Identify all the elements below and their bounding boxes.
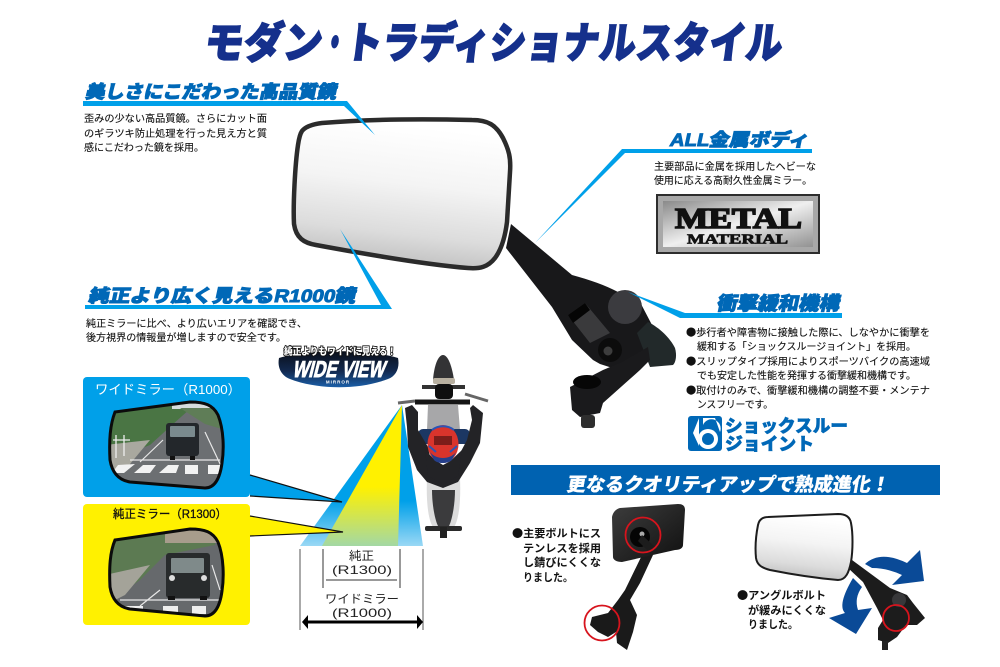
legs: [418, 429, 470, 444]
arm window: [568, 303, 610, 343]
callout: all-metal body: [535, 129, 816, 243]
badge text METAL: METAL: [675, 204, 802, 235]
title: ・: [319, 9, 351, 71]
mirror arm: [506, 224, 652, 372]
angle bolt detail: [737, 514, 925, 650]
double arrow: [302, 615, 423, 629]
bullet list: でも安定した性能を発揮する衝撃緩和機構です。: [697, 367, 916, 382]
wedge: wide mirror callout: [250, 475, 342, 502]
helmet: [428, 425, 458, 463]
mirror glass and frame: [294, 119, 510, 268]
rear fairing: [427, 478, 460, 527]
mirror back: [612, 504, 685, 562]
shock-through joint logo: [688, 413, 848, 456]
badge text MATERIAL: MATERIAL: [687, 232, 788, 248]
front fairing: [433, 355, 454, 380]
badge wordmark: WIDE VIEW: [291, 356, 390, 382]
logo text: ジョイント: [725, 431, 814, 456]
banner: [511, 465, 940, 497]
red highlight circles: [584, 518, 660, 640]
arm: [590, 553, 653, 650]
leader line: [535, 149, 812, 243]
panel background: [83, 377, 250, 497]
panel: stock mirror view: [83, 504, 250, 625]
badge subtitle: MIRROR: [326, 380, 350, 384]
heading: 美しさにこだわった高品質鏡: [84, 81, 340, 102]
bullet list: ●歩行者や障害物に接触した際に、しなやかに衝撃を: [686, 324, 930, 339]
angle bolt: [598, 338, 622, 362]
headlight: [433, 378, 455, 384]
rotation arrow bottom: [829, 578, 872, 634]
main mirror product photo: [294, 119, 676, 428]
bullet list: ンスフリーです。: [697, 396, 773, 411]
description: 感にこだわった鏡を採用。: [84, 139, 204, 154]
description: のギラツキ防止処理を行った見え方と質: [84, 125, 267, 140]
description: りました。: [523, 569, 573, 585]
centre body: [427, 405, 460, 430]
wide view badge: [279, 343, 399, 387]
description: し錆びにくくな: [523, 554, 601, 570]
tail: [440, 527, 447, 538]
description: 歪みの少ない高品質鏡。さらにカット面: [84, 110, 267, 125]
callout: premium mirror: [83, 81, 375, 154]
leader line: [85, 229, 392, 309]
heading: 衝撃緩和機構: [715, 292, 843, 315]
small mirror: [756, 514, 852, 580]
stock label: 純正: [349, 549, 374, 563]
mount bracket: [570, 347, 650, 417]
bullet list: 緩和する「ショックスルージョイント」を採用。: [697, 338, 916, 353]
banner background: [511, 465, 940, 495]
stock label: (R1300): [332, 563, 392, 577]
torso fill: [425, 450, 462, 484]
description: テンレスを採用: [523, 540, 601, 556]
badge tagline: 純正よりもワイドに見える！: [284, 343, 396, 358]
width dimension diagram: [300, 549, 423, 630]
wide field of view: [300, 405, 423, 546]
rotation arrow top: [865, 550, 924, 585]
mount thread: [882, 641, 888, 650]
description: が緩みにくくな: [748, 602, 826, 618]
logo icon: [688, 416, 722, 451]
panel label: ワイドミラー（R1000）: [95, 382, 241, 397]
panel label: 純正ミラー（R1300）: [113, 507, 227, 521]
description: りました。: [748, 616, 798, 632]
stainless bolt detail: [512, 504, 685, 650]
rider jacket and arms: [405, 405, 483, 488]
handlebar and mirrors: [398, 384, 488, 403]
badge oval: [279, 351, 399, 387]
wide label: (R1000): [332, 606, 392, 620]
title: トラディショナルスタイル: [342, 9, 787, 71]
stock field of view: [322, 405, 402, 546]
wedge: stock mirror callout: [250, 516, 343, 536]
wide label: ワイドミラー: [325, 592, 399, 606]
pivot bolt head: [608, 290, 642, 324]
logo text: ショックスルー: [725, 413, 848, 438]
mount thread: [581, 415, 595, 428]
title: モダン: [201, 9, 327, 71]
bullet list: ●取付けのみで、衝撃緩和機構の調整不要・メンテナ: [686, 382, 930, 397]
description: ●アングルボルト: [737, 587, 826, 603]
bullet list: ●スリップタイプ採用によりスポーツバイクの高速域: [686, 353, 930, 368]
arm: [848, 560, 925, 643]
description: 主要部品に金属を採用したヘビーな: [654, 158, 816, 173]
pivot block: [637, 322, 676, 367]
panel: wide mirror view: [83, 377, 250, 497]
rear tyre: [425, 526, 462, 531]
field of view fan: [300, 405, 423, 546]
callout: R1000 mirror: [85, 229, 392, 344]
mirror view photo: [105, 527, 227, 619]
panel background: [83, 504, 250, 625]
bolt knob: [892, 593, 906, 607]
description: 使用に応える高耐久性金属ミラー。: [654, 172, 812, 187]
heading: 純正より広く見えるR1000鏡: [87, 285, 359, 306]
mirror mount: [630, 527, 655, 552]
description: 純正ミラーに比べ、より広いエリアを確認でき、: [86, 315, 307, 330]
heading: ALL金属ボディ: [668, 129, 812, 150]
dimension lines: [300, 549, 423, 630]
motorcycle rider: [398, 355, 488, 538]
description: 後方視界の情報量が増しますので安全です。: [86, 329, 286, 344]
description: ●主要ボルトにス: [512, 525, 601, 541]
badge plate: [656, 194, 820, 254]
leader line: [83, 101, 375, 135]
leader line: [628, 292, 842, 318]
callout: shock absorbing mechanism: [628, 292, 932, 411]
red highlight circle: [883, 605, 909, 631]
mirror view photo: [105, 400, 227, 492]
metal material badge: [656, 194, 820, 254]
banner text: 更なるクオリティアップで熟成進化！: [565, 469, 893, 497]
rear seat: [432, 490, 455, 526]
